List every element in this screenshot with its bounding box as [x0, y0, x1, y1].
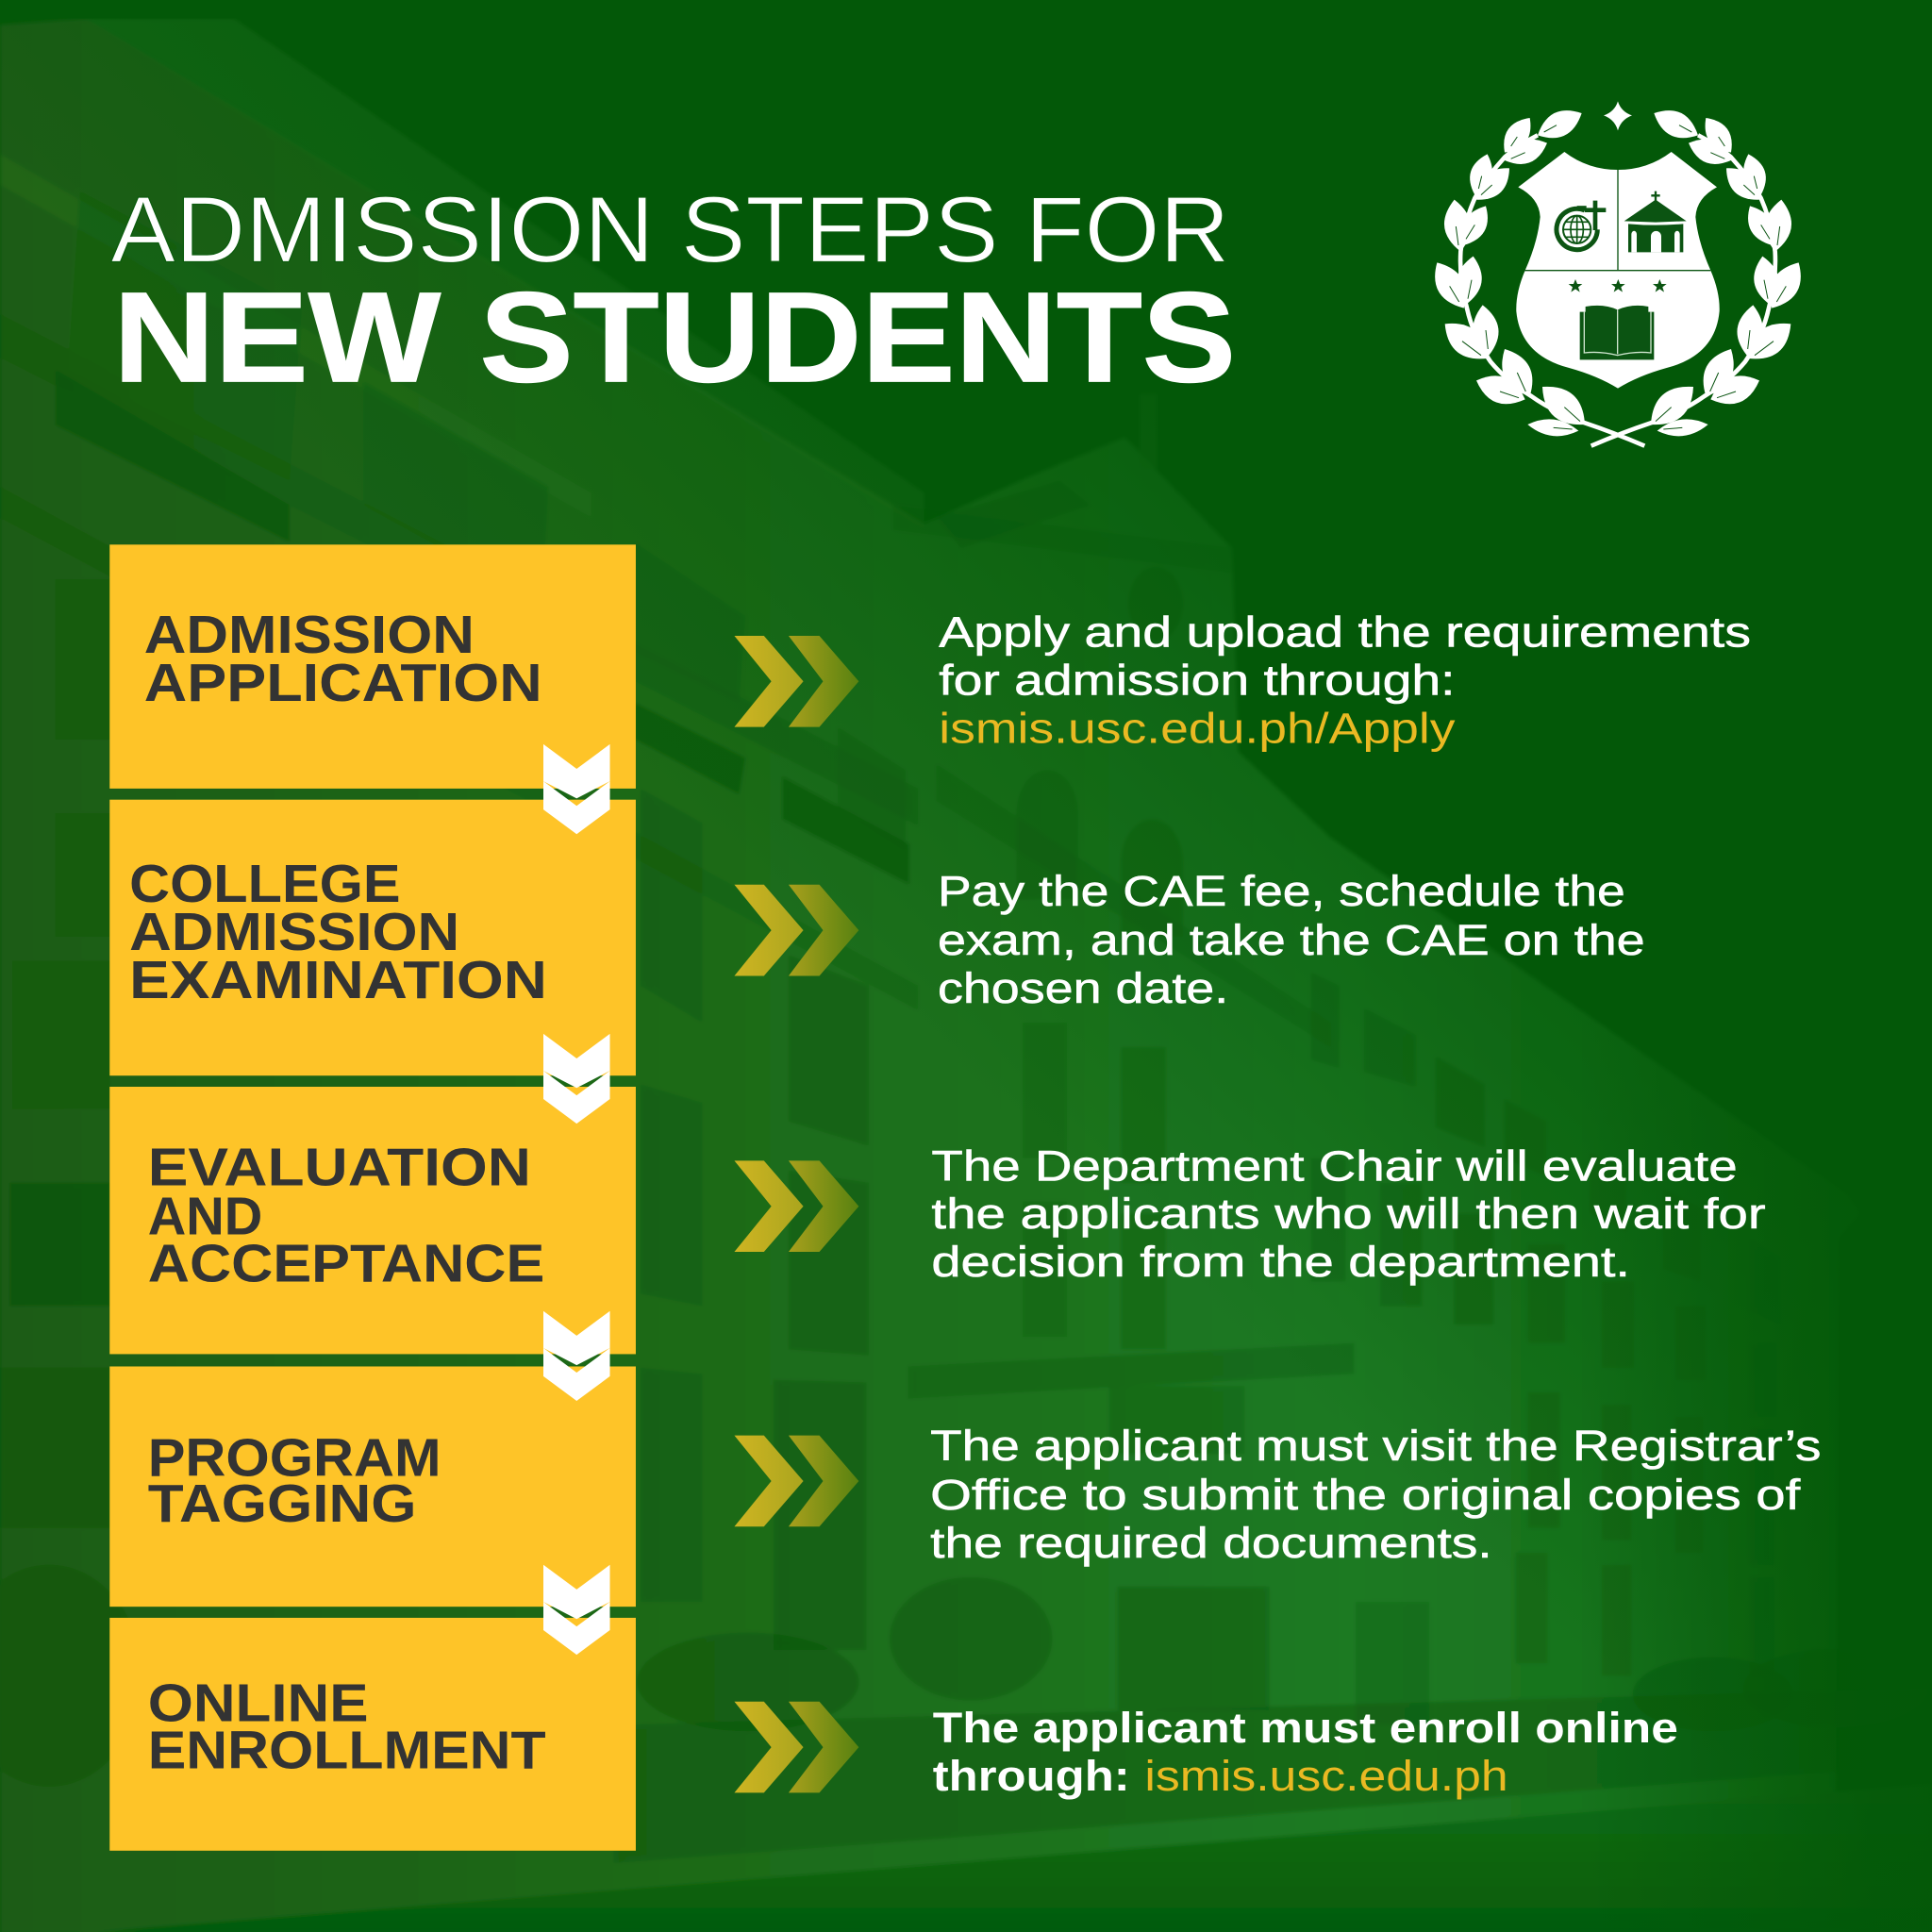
text block: step 5 description: through: — [933, 1752, 1130, 1800]
text block: step 3 description: the applicants who will then wait for — [931, 1190, 1766, 1238]
middle strip windows — [641, 789, 702, 1023]
text block: step 4 description — [930, 1422, 1821, 1567]
pavement — [0, 1784, 1932, 1932]
title: NEW STUDENTS — [113, 265, 1236, 408]
icon: four-point star — [1604, 101, 1632, 130]
text block: step 5 description — [933, 1704, 1678, 1800]
arrow: step 4 to description — [734, 1436, 858, 1526]
panel: admission application: ADMISSION — [144, 605, 475, 664]
panel: evaluation and acceptance: ACCEPTANCE — [148, 1233, 544, 1292]
panel: evaluation and acceptance — [109, 1087, 636, 1354]
step boxes column — [109, 544, 636, 1851]
icon: church — [1624, 192, 1687, 252]
icon: shield — [1516, 152, 1720, 389]
text block: step 2 description: Pay the CAE fee, schedule the — [938, 867, 1625, 915]
upper window blocks — [68, 191, 302, 480]
icon: left laurel branch — [1435, 110, 1644, 446]
text block: step 1 description: ismis.usc.edu.ph/Apply — [939, 705, 1456, 753]
panel: online enrollment: ENROLLMENT — [148, 1720, 546, 1779]
left strip windows and panels — [56, 579, 109, 740]
panel: program tagging: TAGGING — [148, 1474, 416, 1533]
panel: college admission examination: COLLEGE — [129, 854, 400, 913]
panel: program tagging — [109, 1366, 636, 1607]
icon: down chevrons between step 1 and 2 — [543, 744, 610, 834]
panel: college admission examination: ADMISSION — [129, 902, 459, 961]
icon: university crest with laurel wreath — [1435, 101, 1801, 446]
text block: step 3 description: The Department Chair will evaluate — [931, 1141, 1738, 1190]
panel: evaluation and acceptance: AND — [148, 1187, 262, 1246]
text block: step 3 description: decision from the department. — [931, 1238, 1630, 1286]
eaves and floor bands — [86, 19, 924, 530]
text block: step 1 description — [939, 608, 1751, 753]
tower details — [1140, 394, 1157, 468]
icon: down chevrons between step 4 and 5 — [543, 1565, 610, 1655]
text block: step 2 description: exam, and take the CAE on the — [938, 916, 1645, 964]
icon: down chevrons between step 3 and 4 — [543, 1311, 610, 1401]
title: ADMISSION STEPS FOR — [111, 178, 1230, 283]
text block: step 4 description: the required documents. — [930, 1519, 1492, 1567]
text block: step 5 description: ismis.usc.edu.ph — [1144, 1752, 1508, 1800]
icon: three stars — [1569, 279, 1667, 292]
arrow: step 3 to description — [734, 1160, 858, 1252]
panel: program tagging: PROGRAM — [148, 1428, 441, 1488]
arrow: step 2 to description — [734, 885, 858, 975]
panel: admission application: APPLICATION — [144, 653, 542, 712]
panel: college admission examination — [109, 800, 636, 1075]
text block: step 4 description: Office to submit the original copies of — [930, 1471, 1801, 1519]
panel: admission application — [109, 544, 636, 789]
panel: online enrollment — [109, 1618, 636, 1851]
text block: step 1 description: Apply and upload the requirements — [939, 608, 1751, 657]
fence — [613, 1688, 1932, 1863]
text block: step 1 description: for admission through: — [939, 657, 1456, 705]
shield dividers — [1524, 170, 1710, 271]
text block: step 4 description: The applicant must visit the Registrar’s — [930, 1422, 1821, 1470]
text block: step 2 description: chosen date. — [938, 964, 1228, 1012]
text block: step 5 description: The applicant must enroll online — [933, 1704, 1678, 1752]
text block: step 3 description — [931, 1141, 1766, 1286]
text block: step 2 description — [938, 867, 1645, 1012]
panel: evaluation and acceptance: EVALUATION — [148, 1137, 531, 1196]
icon: down chevrons between step 2 and 3 — [543, 1034, 610, 1124]
panel: college admission examination: EXAMINATION — [129, 950, 547, 1009]
right wing windows — [1311, 973, 1780, 1675]
entrance porch — [908, 1343, 1354, 1398]
arrow: step 5 to description — [734, 1702, 858, 1792]
icon: globe and cross — [1557, 201, 1606, 250]
icon: open book — [1580, 306, 1654, 359]
panel: online enrollment: ONLINE — [148, 1674, 369, 1733]
title — [111, 178, 1236, 408]
trees — [637, 1633, 858, 1731]
arrow: step 1 to description — [734, 636, 858, 727]
icon: right laurel branch — [1591, 110, 1801, 446]
